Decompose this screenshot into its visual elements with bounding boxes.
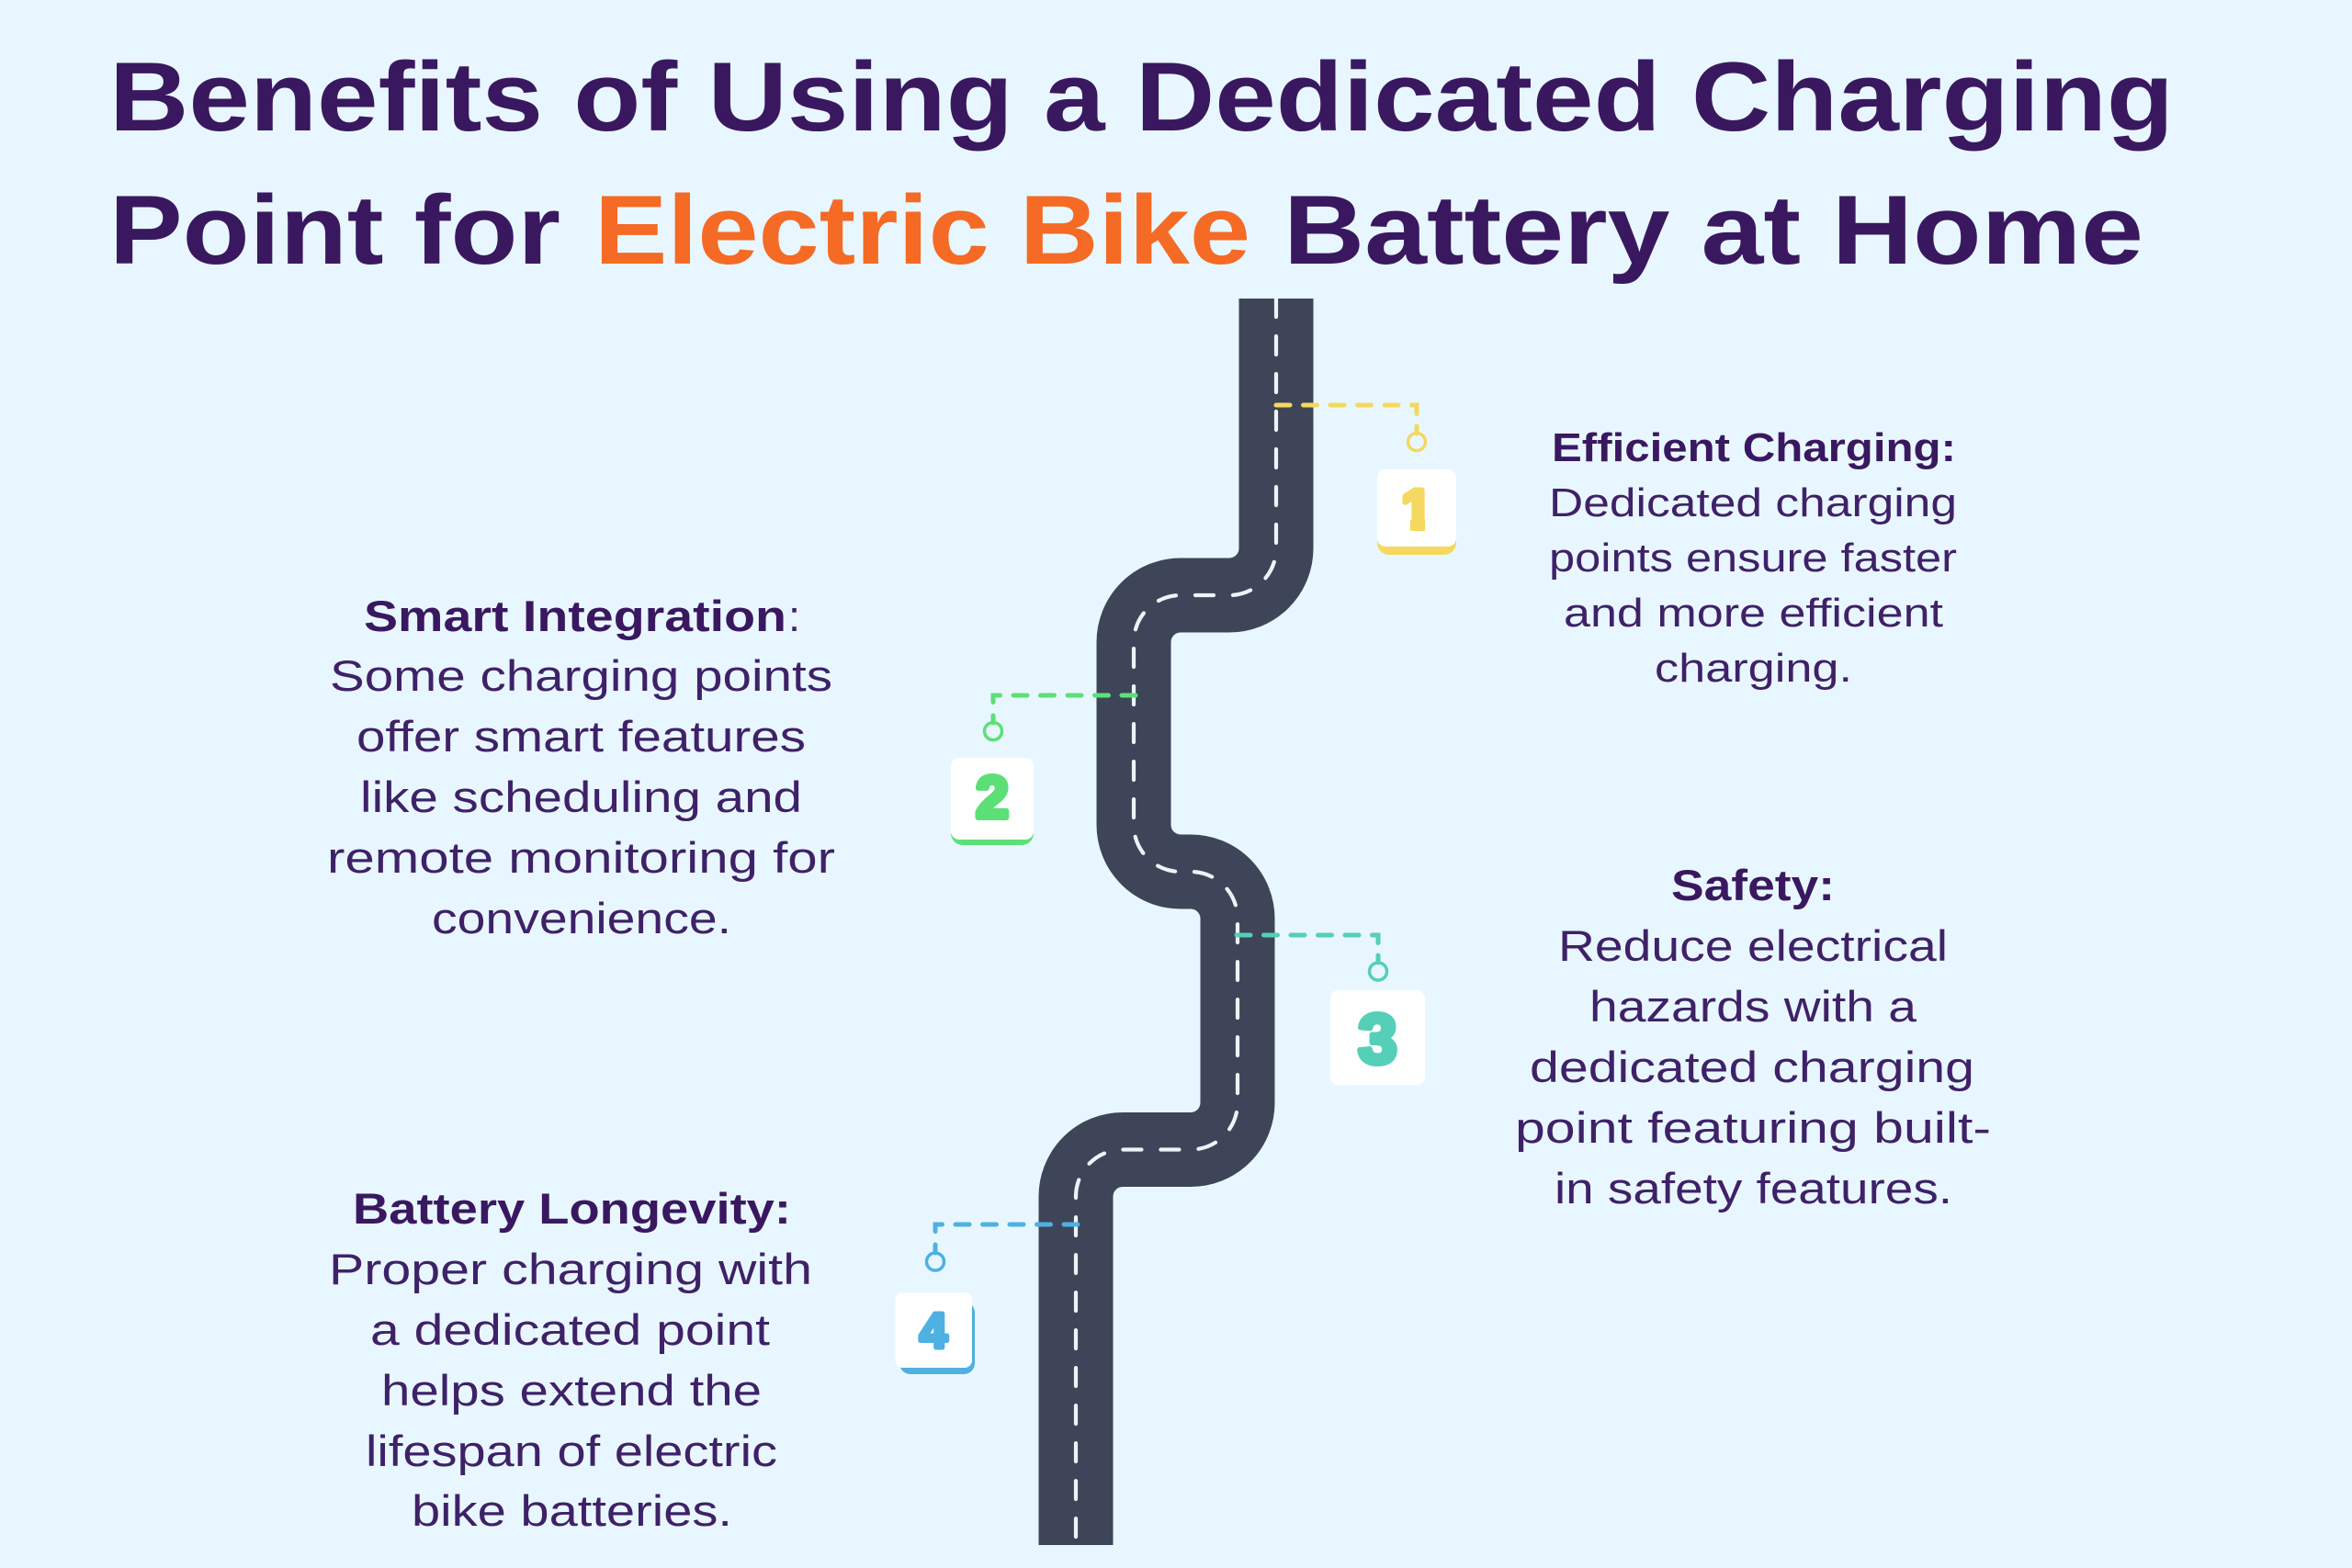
connector 4	[926, 1224, 1078, 1270]
text block: Safety	[1515, 861, 1991, 1213]
number badge 2	[951, 758, 1034, 845]
text block: Efficient Charging: points ensure faster	[1549, 536, 1957, 581]
text block: Battery Longevity: Proper charging with	[329, 1245, 812, 1293]
text block: Smart Integration: Some charging points	[330, 651, 832, 700]
number badge 4	[895, 1293, 975, 1374]
connector 3	[1237, 935, 1387, 980]
callout 3: teal marker	[1237, 935, 1425, 1086]
callout 4: blue marker	[895, 1224, 1078, 1374]
callout 2: green marker	[951, 695, 1136, 845]
title	[109, 41, 2174, 285]
text block: Battery Longevity	[329, 1184, 812, 1535]
text block: Smart Integration: offer smart features	[356, 712, 806, 761]
text block: Efficient Charging	[1549, 425, 1957, 691]
text block: Smart Integration: Smart Integration	[364, 592, 786, 640]
text block: Efficient Charging: Efficient Charging:	[1552, 425, 1956, 470]
number badge 3	[1330, 990, 1425, 1086]
number badge 2: 2	[976, 764, 1009, 830]
title: Electric Bike	[594, 175, 1250, 285]
text block: Battery Longevity: Battery Longevity:	[353, 1184, 791, 1233]
text block: Safety: dedicated charging	[1530, 1043, 1974, 1091]
text block: Smart Integration: :	[788, 592, 800, 640]
title: Battery at Home	[1283, 175, 2143, 285]
text block: Smart Integration: remote monitoring for	[327, 833, 835, 882]
text block: Efficient Charging: charging.	[1655, 646, 1852, 691]
number badge 1: 1	[1401, 479, 1432, 540]
text block: Battery Longevity: helps extend the	[381, 1366, 762, 1415]
text block: Efficient Charging: Dedicated charging	[1549, 480, 1957, 525]
text block: Smart Integration	[327, 592, 835, 942]
text block: Smart Integration: convenience.	[432, 894, 731, 942]
text block: Safety: point featuring built-	[1515, 1103, 1991, 1152]
text block: Safety: Reduce electrical	[1558, 921, 1948, 970]
text block: Safety: in safety features.	[1555, 1164, 1952, 1213]
winding road	[1076, 299, 1276, 1545]
text block: Battery Longevity: bike batteries.	[412, 1486, 732, 1535]
title: Point for	[109, 175, 560, 285]
text block: Battery Longevity: a dedicated point	[370, 1305, 770, 1354]
callout 1: yellow marker	[1276, 405, 1456, 555]
number badge 1	[1377, 469, 1456, 555]
title: Benefits of Using a Dedicated Charging	[109, 41, 2174, 152]
text block: Battery Longevity: lifespan of electric	[366, 1427, 777, 1475]
text block: Safety: hazards with a	[1589, 982, 1917, 1031]
connector 1	[1276, 405, 1426, 450]
text block: Smart Integration: like scheduling and	[360, 773, 802, 821]
connector 2	[985, 695, 1136, 740]
text block: Safety: Safety:	[1671, 861, 1835, 909]
number badge 4: 4	[920, 1303, 947, 1359]
text block: Efficient Charging: and more efficient	[1564, 591, 1943, 636]
number badge 3: 3	[1358, 1000, 1397, 1078]
